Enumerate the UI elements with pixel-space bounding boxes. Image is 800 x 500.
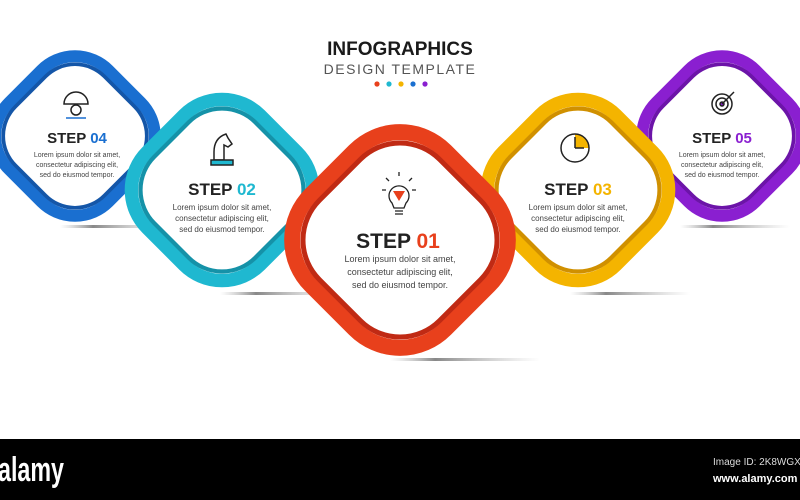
text: step 01: STEP 01: [356, 230, 440, 253]
text: step 04: Lorem ipsum dolor sit amet,: [34, 152, 120, 159]
text: step 05: sed do eiusmod tempor.: [685, 172, 759, 179]
text: step 04: sed do eiusmod tempor.: [40, 172, 114, 179]
text: step 03: sed do eiusmod tempor.: [535, 225, 621, 234]
text: step 04: STEP 04: [47, 130, 108, 147]
icon: clock: [561, 134, 589, 162]
text: step 05: Lorem ipsum dolor sit amet,: [679, 152, 765, 159]
icon: target: [712, 92, 734, 114]
icon: light bulb: [382, 172, 416, 214]
text: step 03: [529, 180, 627, 234]
text: step 03: STEP 03: [544, 180, 612, 199]
text: step 01: sed do eiusmod tempor.: [352, 280, 448, 290]
title: DESIGN TEMPLATE: [324, 61, 476, 77]
panel: step 01: [266, 106, 534, 374]
panel: step 02: [109, 77, 335, 303]
panel: step 03: [465, 77, 691, 303]
text: step 02: consectetur adipiscing elit,: [175, 214, 269, 223]
text: step 04: [34, 130, 120, 179]
text: step 02: [173, 180, 271, 234]
text: step 03: Lorem ipsum dolor sit amet,: [529, 203, 627, 212]
text: step 01: Lorem ipsum dolor sit amet,: [344, 254, 456, 264]
text: step 05: [679, 130, 765, 179]
panel: step 04: [0, 37, 174, 235]
shadows: [60, 225, 790, 361]
footer bar: [0, 439, 800, 500]
text: step 01: [344, 230, 456, 290]
title: INFOGRAPHICS: [327, 39, 473, 60]
text: step 02: STEP 02: [188, 180, 256, 199]
text: step 04: consectetur adipiscing elit,: [36, 162, 118, 169]
icon: chess knight: [211, 134, 233, 165]
text: step 02: sed do eiusmod tempor.: [179, 225, 265, 234]
title: [324, 39, 476, 87]
footer bar: www.alamy.com: [712, 473, 798, 485]
text: step 02: Lorem ipsum dolor sit amet,: [173, 203, 271, 212]
text: step 01: consectetur adipiscing elit,: [347, 267, 453, 277]
icon: worker helmet: [64, 92, 88, 118]
text: step 05: STEP 05: [692, 130, 752, 147]
text: step 03: consectetur adipiscing elit,: [531, 214, 625, 223]
footer bar: Image ID: 2K8WGX: [713, 457, 800, 468]
footer bar: alamy: [0, 451, 64, 489]
text: step 05: consectetur adipiscing elit,: [681, 162, 763, 169]
panel: step 05: [623, 37, 800, 235]
